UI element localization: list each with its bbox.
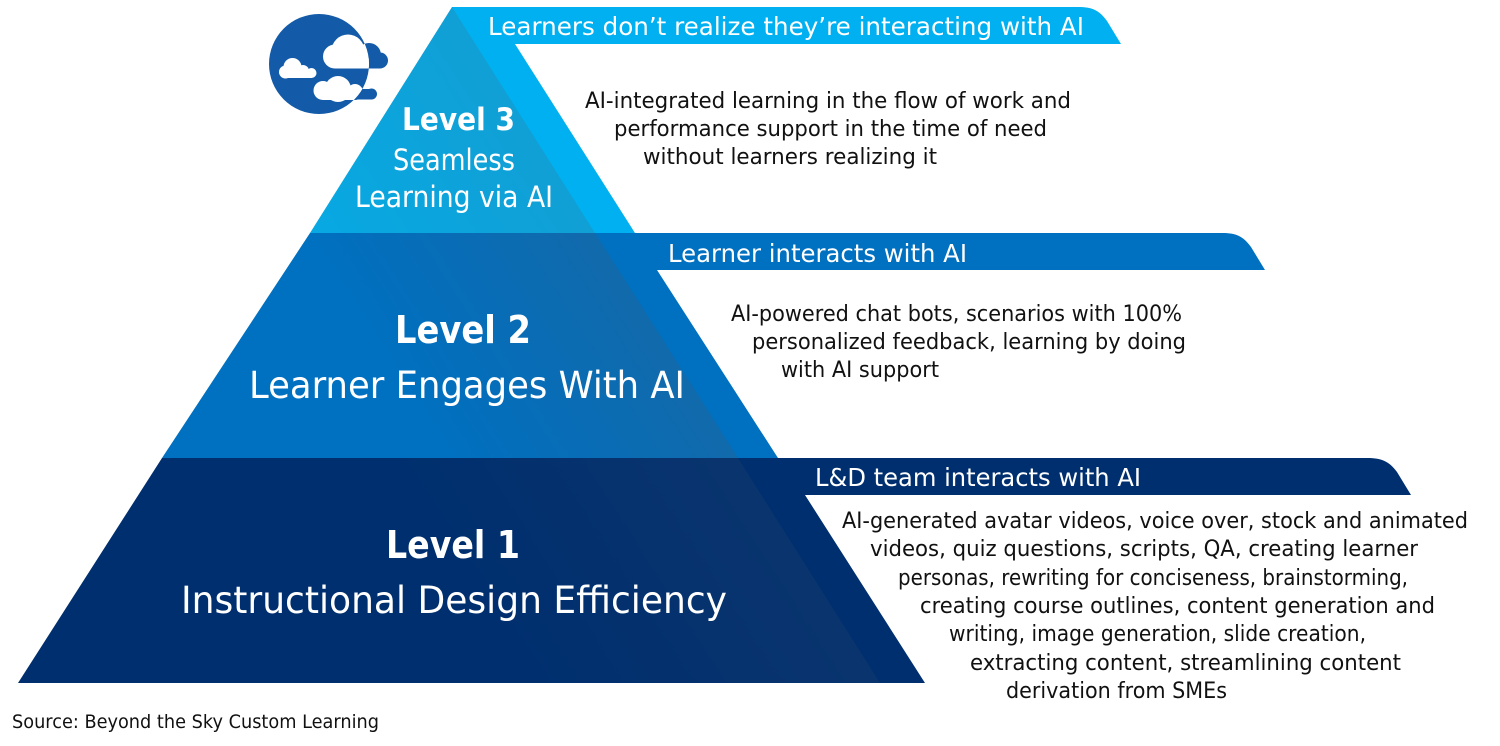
level 2 banner text: Learner interacts with AI [668, 239, 967, 268]
icon: moon with clouds [269, 14, 388, 114]
level 3 banner text: Learners don’t realize they’re interacting with AI [488, 12, 1084, 41]
level 2 inner shading [162, 233, 738, 458]
level 1 banner text: L&D team interacts with AI [815, 463, 1141, 492]
level 3 inner shading [310, 7, 595, 233]
panel: level 3 tier and banner [310, 7, 1121, 233]
level 3 description [585, 89, 1071, 170]
level 3 description: performance support in the time of need [614, 117, 1047, 142]
panel: level 2 tier and banner [162, 233, 1265, 458]
level 1 description: writing, image generation, slide creation, [949, 622, 1366, 647]
level 3 description: without learners realizing it [643, 145, 937, 170]
level 3 label: Learning via AI [355, 180, 553, 214]
level 1 description: creating course outlines, content generation and [920, 594, 1435, 619]
level 1 description: derivation from SMEs [1006, 679, 1227, 704]
level 1 label [181, 523, 727, 622]
level 1 description [842, 509, 1468, 704]
level 1 description: videos, quiz questions, scripts, QA, creating learner [870, 537, 1419, 562]
level 2 label: Learner Engages With AI [249, 364, 685, 407]
level 2 description: AI-powered chat bots, scenarios with 100% [731, 302, 1182, 327]
level 1 description: personas, rewriting for conciseness, brainstorming, [898, 566, 1408, 591]
level 3 label: Level 3 [402, 102, 515, 138]
level 2 label: Level 2 [395, 308, 531, 352]
level 3 label [355, 102, 553, 214]
level 1 description: AI-generated avatar videos, voice over, stock and animated [842, 509, 1468, 534]
panel: level 1 tier and banner [18, 458, 1411, 683]
level 1 inner shading [18, 458, 880, 683]
level 2 description [731, 302, 1186, 383]
source note: Source: Beyond the Sky Custom Learning [12, 711, 379, 733]
level 3 label: Seamless [393, 143, 515, 177]
level 1 label: Instructional Design Efficiency [181, 579, 727, 622]
level 2 label [249, 308, 685, 407]
level 1 label: Level 1 [386, 523, 520, 567]
level 2 description: with AI support [781, 358, 939, 383]
level 1 description: extracting content, streamlining content [970, 651, 1401, 676]
level 2 description: personalized feedback, learning by doing [752, 330, 1186, 355]
level 3 description: AI-integrated learning in the flow of work and [585, 89, 1071, 114]
